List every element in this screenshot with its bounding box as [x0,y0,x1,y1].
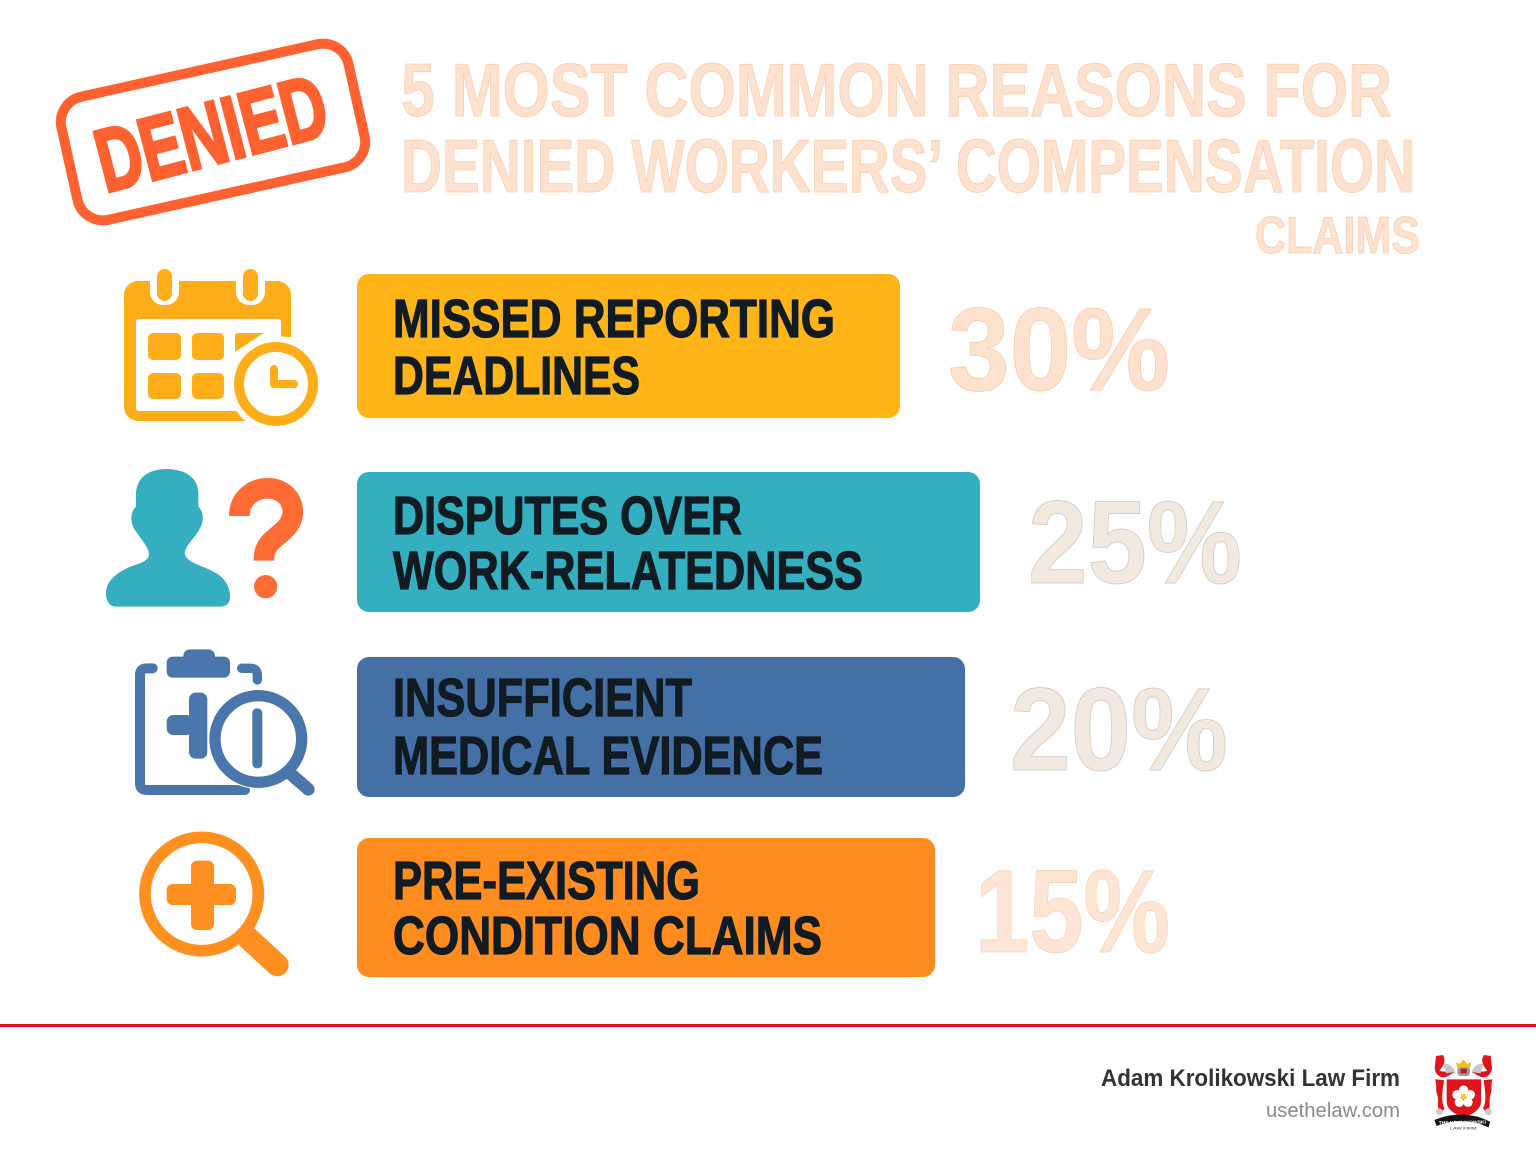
bar label: DEADLINES [393,346,640,406]
stamp border [56,39,370,225]
firm website: usethelaw.com [1266,1100,1400,1122]
footer [0,1024,1536,1130]
bar: orange [357,838,935,977]
icon: person with question mark [106,469,293,607]
percentage: 15%: 15% [975,846,1170,978]
bar label: MEDICAL EVIDENCE [393,726,823,786]
bar label: CONDITION CLAIMS [393,906,822,966]
bar label [393,851,822,966]
firm name: Adam Krolikowski Law Firm [1101,1065,1400,1092]
logo: Krolikowski crest [1434,1055,1493,1130]
bar label [393,668,823,786]
bar label: WORK-RELATEDNESS [393,541,863,601]
bar label [393,289,835,406]
title line 3: CLAIMS [1255,207,1420,265]
bar: amber [357,274,900,418]
footer rule [0,1024,1536,1027]
percentage: 25%: 25% [1028,477,1242,609]
icon: calendar with clock [124,262,324,432]
stamp word: DENIED [85,55,338,211]
logo: Krolikowski crest: LAW FIRM [1450,1126,1477,1130]
bar: blue [357,657,965,797]
denied stamp [56,39,370,225]
bar label: PRE-EXISTING [393,851,700,911]
percentage: 20%: 20% [1010,664,1228,796]
icon: clipboard with magnifier [140,649,308,790]
bar label: DISPUTES OVER [393,486,742,546]
bar label: MISSED REPORTING [393,289,835,349]
panel: insufficient medical evidence [140,649,1228,797]
panel: pre-existing condition claims [145,837,1170,978]
icon: magnifier with plus [145,837,277,965]
bar label [393,486,863,601]
logo: Krolikowski crest: THE KROLIKOWSKI [1439,1120,1486,1125]
panel: missed reporting deadlines [124,262,1170,432]
panel: disputes over work-relatedness [106,469,1242,612]
bar: teal [357,472,980,612]
bar label: INSUFFICIENT [393,668,692,728]
title [401,48,1420,265]
percentage: 30%: 30% [948,284,1170,416]
